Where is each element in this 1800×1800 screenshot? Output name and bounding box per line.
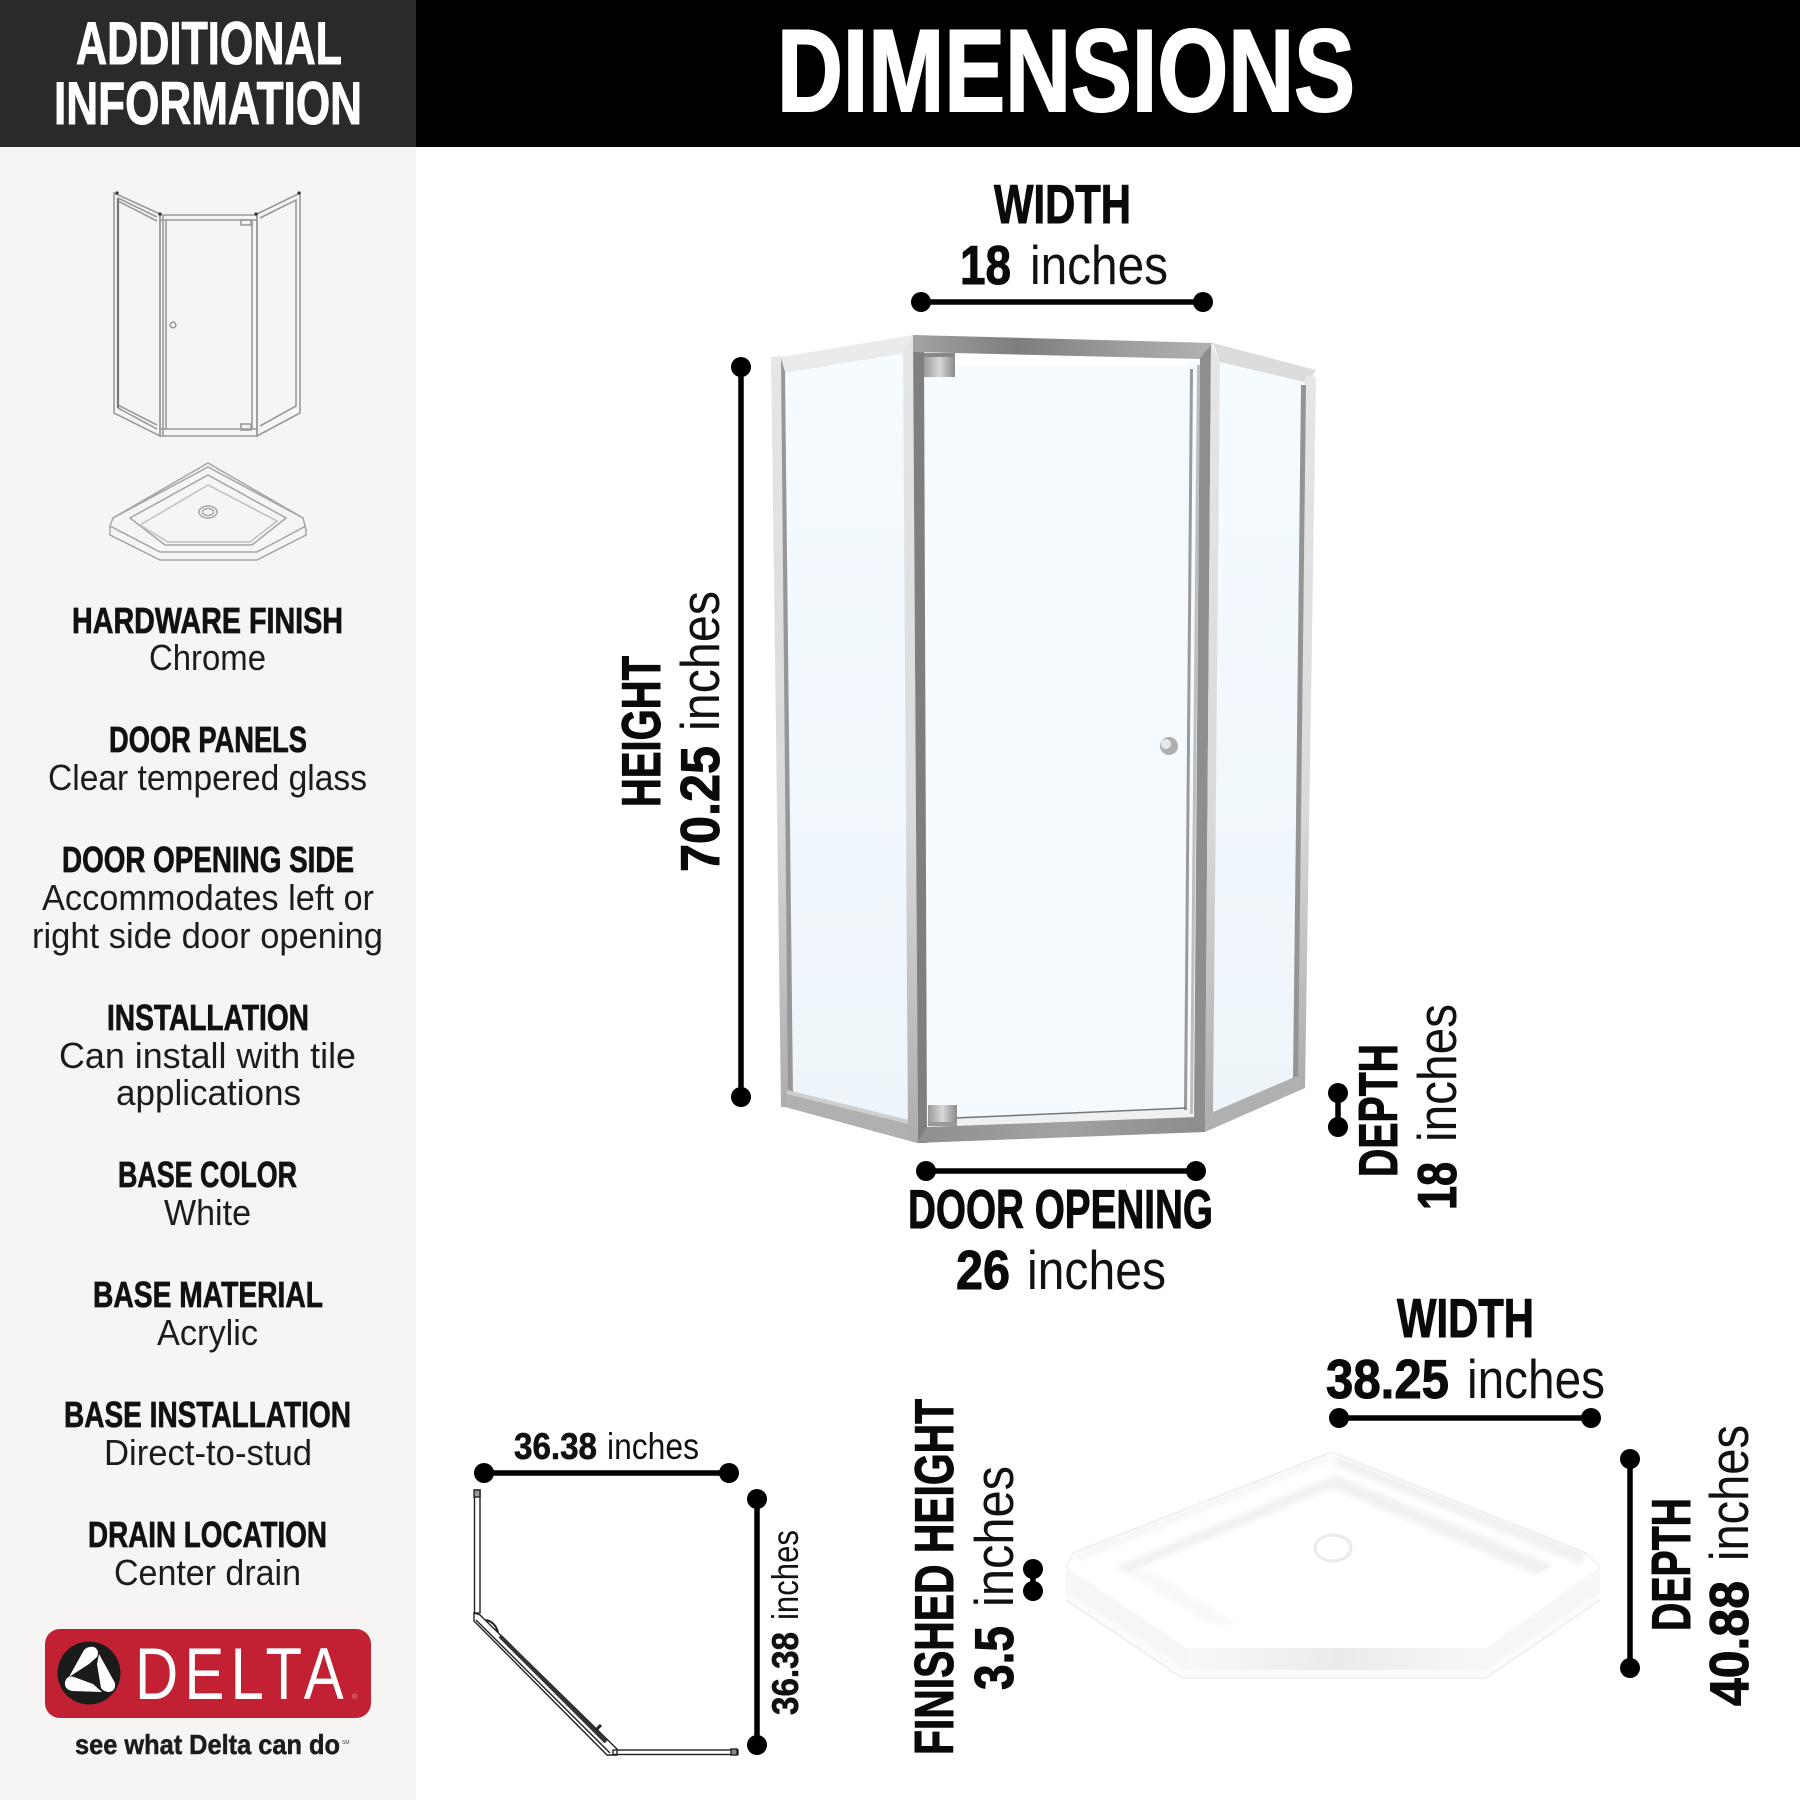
spec: drain location [88, 1514, 327, 1593]
logo: delta: SM [342, 1740, 350, 1746]
spec: installation: applications [116, 1072, 301, 1113]
label: top view width 36.38 inches: inches [607, 1426, 699, 1467]
right glass panel [1213, 362, 1305, 1112]
label: top view width 36.38 inches [514, 1426, 699, 1467]
label: finished height 3.5 inches: 3.5 [963, 1626, 1025, 1690]
spec: door opening side: DOOR OPENING SIDE [62, 839, 354, 880]
image: shower door [771, 335, 1316, 1143]
arrow: top view width [474, 1463, 739, 1483]
label: base width 38.25 inches: inches [1467, 1348, 1605, 1410]
panel: additional information sidebar [0, 147, 416, 1800]
arrow: door opening [916, 1161, 1206, 1181]
door bottom stripe [955, 1108, 1186, 1118]
label: depth 18 inches: 18 [1406, 1162, 1468, 1210]
label: base depth 40.88 inches: 40.88 [1698, 1581, 1760, 1706]
label: finished height 3.5 inches [903, 1399, 1025, 1755]
arrow: top view depth [747, 1489, 767, 1755]
spec: door opening side [32, 839, 383, 956]
label: depth 18 inches [1347, 1004, 1468, 1210]
label: door opening 26 inches [908, 1178, 1213, 1301]
icon: top view plan drawing [474, 1490, 738, 1755]
logo: delta: see what Delta can do [75, 1729, 340, 1760]
label: top view depth 36.38 inches: 36.38 [765, 1632, 806, 1715]
image: shower base [1066, 1452, 1600, 1678]
label: depth 18 inches: DEPTH [1347, 1044, 1409, 1177]
spec: door opening side: right side door opening [32, 915, 383, 956]
label: door opening 26 inches: inches [1027, 1239, 1166, 1301]
spec: hardware finish: Chrome [149, 637, 266, 678]
label: height 70.25 inches [610, 591, 731, 872]
label: door opening 26 inches: DOOR OPENING [908, 1178, 1213, 1240]
spec: door panels [48, 719, 367, 798]
spec: door panels: Clear tempered glass [48, 757, 367, 798]
header: additional information: INFORMATION [54, 70, 362, 137]
arrow: base depth [1620, 1449, 1640, 1678]
title: dimensions: DIMENSIONS [777, 5, 1355, 136]
label: top width 18 inches: 18 [960, 234, 1011, 296]
spec: installation [59, 997, 356, 1113]
spec: hardware finish [72, 600, 343, 678]
logo: delta: DELTA [135, 1634, 350, 1715]
hinge top [924, 353, 955, 377]
spec: installation: Can install with tile [59, 1035, 356, 1076]
bottom rail [917, 1117, 1205, 1143]
spec: base installation: Direct-to-stud [104, 1432, 312, 1473]
spec: base material: BASE MATERIAL [93, 1274, 323, 1315]
title: dimensions [416, 0, 1800, 147]
spec: base color: White [164, 1192, 251, 1233]
spec: base installation [64, 1394, 351, 1473]
label: height 70.25 inches: HEIGHT [610, 656, 672, 807]
arrow: door depth [1328, 1083, 1348, 1137]
label: door opening 26 inches: 26 [956, 1239, 1010, 1301]
spec: door panels: DOOR PANELS [109, 719, 307, 760]
label: base width 38.25 inches: 38.25 [1326, 1348, 1449, 1410]
spec: base material [93, 1274, 323, 1353]
arrow: top width [911, 292, 1213, 312]
left glass panel [784, 354, 908, 1121]
arrow: base width [1329, 1408, 1601, 1428]
logo: delta: ® [352, 1693, 358, 1701]
label: depth 18 inches: inches [1406, 1004, 1468, 1142]
header: additional information [0, 0, 416, 147]
label: finished height 3.5 inches: FINISHED HEIGHT [903, 1399, 965, 1755]
icon: shower door line drawing [114, 191, 301, 436]
left frame [781, 335, 913, 373]
spec: door opening side: Accommodates left or [42, 877, 374, 918]
label: top view depth 36.38 inches: inches [765, 1530, 806, 1620]
label: top width 18 inches: inches [1030, 234, 1168, 296]
logo: delta [45, 1629, 371, 1760]
door handle [1160, 737, 1178, 755]
label: finished height 3.5 inches: inches [963, 1466, 1025, 1607]
label: base depth 40.88 inches [1640, 1425, 1760, 1706]
label: top view width 36.38 inches: 36.38 [514, 1426, 597, 1467]
door glass [924, 357, 1200, 1127]
label: top view depth 36.38 inches [765, 1530, 806, 1715]
base soft shading [1073, 1452, 1586, 1625]
spec: installation: INSTALLATION [107, 997, 309, 1038]
label: height 70.25 inches: 70.25 [669, 746, 731, 872]
spec: base material: Acrylic [157, 1312, 258, 1353]
label: base depth 40.88 inches: DEPTH [1640, 1498, 1702, 1631]
spec: base installation: BASE INSTALLATION [64, 1394, 351, 1435]
arrow: height [731, 357, 751, 1107]
top rail [913, 335, 1213, 359]
spec: base color [118, 1154, 297, 1233]
label: base depth 40.88 inches: inches [1698, 1425, 1760, 1561]
door right stile [1184, 369, 1193, 1110]
spec: hardware finish: HARDWARE FINISH [72, 600, 343, 641]
header: additional information: ADDITIONAL [76, 10, 342, 77]
hinge bottom [928, 1105, 957, 1126]
label: base width 38.25 inches: WIDTH [1397, 1287, 1534, 1349]
left center post [903, 335, 918, 1143]
spec: base color: BASE COLOR [118, 1154, 297, 1195]
label: top width 18 inches [960, 173, 1168, 296]
label: height 70.25 inches: inches [669, 591, 731, 731]
right frame [1213, 343, 1316, 383]
icon: shower base line drawing [110, 463, 306, 560]
right center post [1205, 343, 1220, 1132]
label: base width 38.25 inches [1326, 1287, 1605, 1410]
arrow: finished height [1023, 1559, 1043, 1601]
spec: drain location: DRAIN LOCATION [88, 1514, 327, 1555]
label: top width 18 inches: WIDTH [994, 173, 1131, 235]
spec: drain location: Center drain [114, 1552, 301, 1593]
